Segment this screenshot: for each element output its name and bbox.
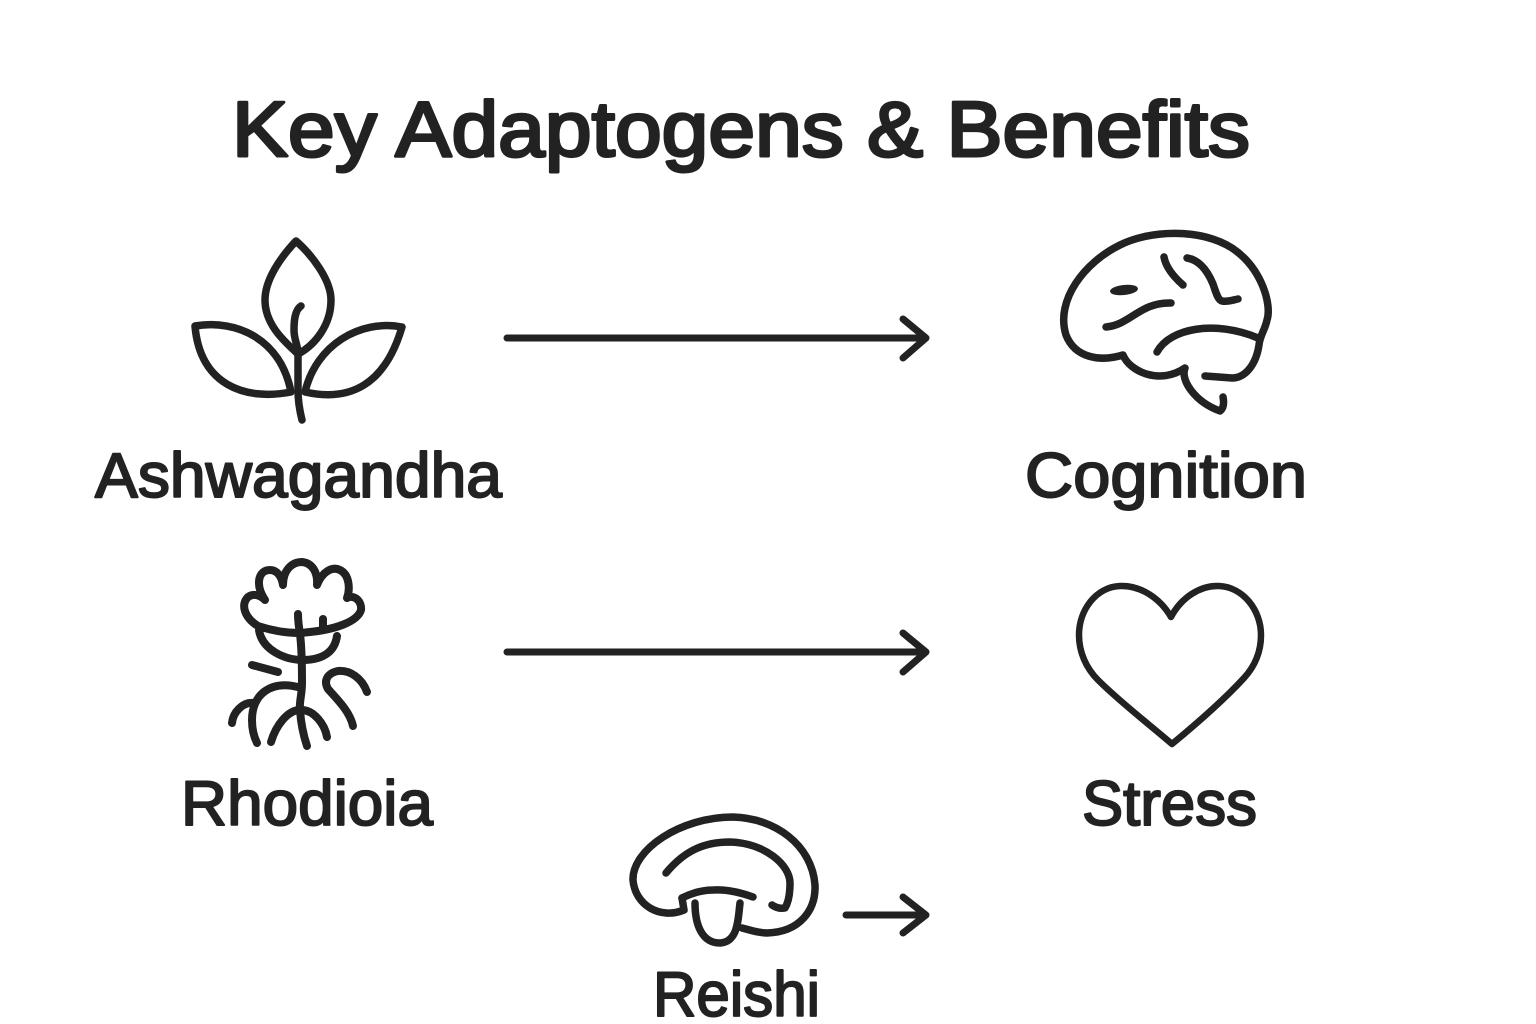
icon: brain (1064, 233, 1268, 411)
arrow: Reishi (846, 897, 926, 933)
icon: heart (1079, 586, 1261, 744)
label: Stress: Stress (1082, 769, 1257, 839)
label: Ashwagandha: Ashwagandha (95, 441, 503, 511)
icon: reishi mushroom (633, 817, 815, 943)
label: Rhodioia: Rhodioia (181, 769, 434, 839)
arrow: Rhodiola to Stress (507, 633, 926, 672)
icon: rhodiola plant (232, 562, 367, 746)
arrow: Ashwagandha to Cognition (507, 319, 926, 358)
label: Cognition: Cognition (1025, 441, 1307, 511)
title: Key Adaptogens & Benefits (232, 85, 1250, 173)
icon: ashwagandha leaves (195, 241, 402, 420)
